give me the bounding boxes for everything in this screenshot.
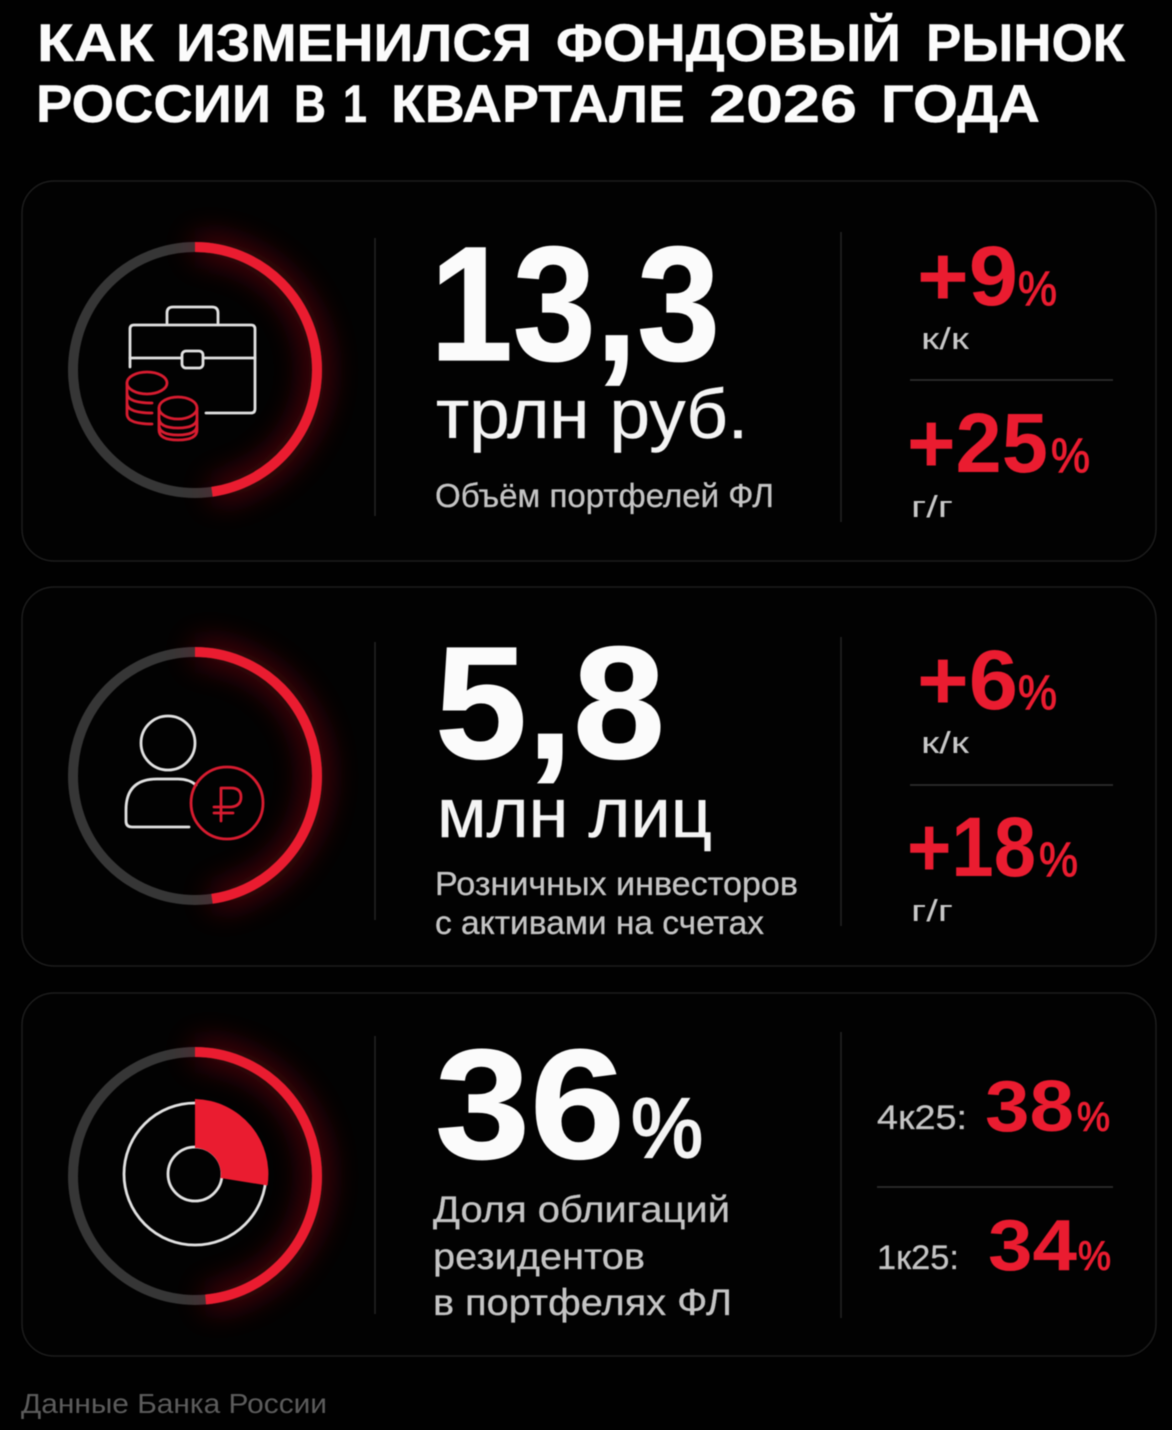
comparison: 1q25 xyxy=(877,1206,1111,1286)
big number: % xyxy=(631,1081,703,1175)
progress ring xyxy=(73,1052,317,1300)
title: КАК xyxy=(37,14,155,73)
title: РЫНОК xyxy=(926,14,1126,73)
change: quarter on quarter xyxy=(917,229,1057,356)
change: year on year: г/г xyxy=(911,489,953,524)
change: quarter on quarter: к/к xyxy=(921,321,970,356)
source note: Данные Банка России xyxy=(21,1388,327,1419)
big number: 36 xyxy=(435,1018,625,1192)
progress ring xyxy=(73,247,317,493)
comparison: 1q25: 1к25: xyxy=(877,1239,959,1277)
comparison: 4q25: % xyxy=(1077,1094,1110,1140)
title: ФОНДОВЫЙ xyxy=(556,12,901,73)
change: year on year: +18 xyxy=(907,800,1036,894)
panel: bond share xyxy=(22,993,1156,1356)
change: year on year: % xyxy=(1039,834,1078,887)
comparison: 4q25: 38 xyxy=(985,1067,1074,1147)
change: year on year xyxy=(907,396,1090,524)
change: year on year xyxy=(907,800,1078,928)
title: ГОДА xyxy=(881,75,1040,134)
title: 1 xyxy=(343,75,367,134)
title: ИЗМЕНИЛСЯ xyxy=(176,14,532,73)
unit: трлн руб. xyxy=(436,375,748,453)
change: quarter on quarter: % xyxy=(1018,667,1057,720)
description: с активами на счетах xyxy=(435,904,765,941)
description xyxy=(433,1189,732,1323)
panel: retail investors xyxy=(22,587,1156,966)
change: year on year: % xyxy=(1051,430,1090,483)
description xyxy=(435,865,798,941)
icon: briefcase with coins xyxy=(127,307,255,440)
change: quarter on quarter: % xyxy=(1018,263,1057,316)
comparison: 1q25: % xyxy=(1078,1233,1111,1279)
comparison: 4q25: 4к25: xyxy=(877,1099,967,1137)
title: В xyxy=(294,75,326,134)
big number: 5,8 xyxy=(435,613,665,792)
unit: млн лиц xyxy=(437,774,712,852)
title: РОССИИ xyxy=(36,75,271,134)
title: КВАРТАЛЕ xyxy=(391,75,685,134)
panel: portfolio volume xyxy=(22,181,1156,561)
progress ring xyxy=(73,652,317,900)
change: quarter on quarter xyxy=(917,633,1057,760)
change: year on year: +25 xyxy=(907,396,1048,490)
description: в портфелях ФЛ xyxy=(433,1282,732,1323)
change: quarter on quarter: +9 xyxy=(917,229,1018,323)
icon: donut chart xyxy=(124,1099,268,1245)
icon: investor with ruble xyxy=(126,716,263,839)
comparison: 1q25: 34 xyxy=(988,1206,1077,1286)
description: резидентов xyxy=(433,1236,645,1277)
change: year on year: г/г xyxy=(911,893,953,928)
title: 2026 xyxy=(709,75,857,134)
change: quarter on quarter: к/к xyxy=(921,725,970,760)
description: Объём портфелей ФЛ xyxy=(435,477,774,514)
title xyxy=(36,12,1126,134)
comparison: 4q25 xyxy=(877,1067,1110,1147)
description: Розничных инвесторов xyxy=(435,865,798,902)
change: quarter on quarter: +6 xyxy=(917,633,1018,727)
description: Доля облигаций xyxy=(433,1189,730,1230)
big number: 13,3 xyxy=(430,212,720,395)
big number xyxy=(435,1018,703,1192)
